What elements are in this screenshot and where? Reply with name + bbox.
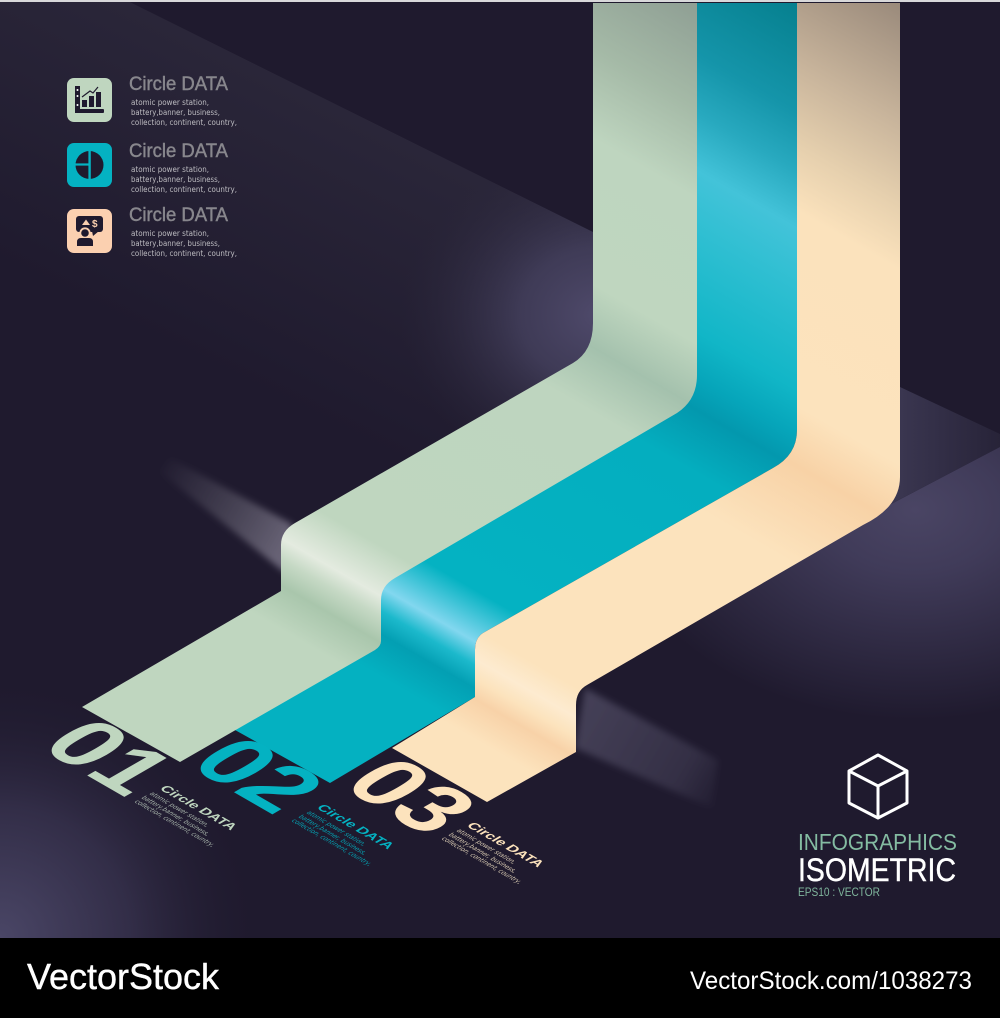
description (131, 165, 237, 194)
title block (798, 829, 957, 899)
footer bar (0, 938, 1000, 1018)
ribbon 02 teal (235, 3, 797, 783)
number 02: 02 (170, 724, 347, 826)
isometric caption 02: atomic power station, (304, 809, 369, 847)
description: collection, continent, country, (131, 185, 237, 194)
legend item 3 (67, 204, 237, 258)
icon: person with speech bubble (67, 209, 112, 253)
footer logo: VectorStock (27, 956, 220, 997)
isometric caption 01: collection, continent, country, (132, 798, 218, 848)
isometric caption 02: battery,banner, business, (296, 813, 370, 856)
isometric caption 03 (439, 820, 549, 885)
light streak left (160, 458, 296, 572)
icon: pie chart (67, 143, 112, 187)
isometric caption 03: battery,banner, business, (446, 831, 520, 874)
isometric caption 02: Circle DATA (313, 802, 399, 851)
description: battery,banner, business, (131, 108, 220, 117)
description: battery,banner, business, (131, 239, 220, 248)
top edge line (0, 0, 1000, 2)
description (131, 98, 237, 127)
isometric caption 01 (132, 783, 242, 848)
isometric caption 01: battery,banner, business, (139, 794, 213, 837)
isometric caption 03: atomic power station, (454, 827, 519, 865)
background: right side face (870, 387, 1000, 515)
background: bottom-left glow (0, 670, 270, 938)
legend item 1 (67, 73, 237, 127)
number 01: 01 (21, 706, 198, 808)
description: collection, continent, country, (131, 118, 237, 127)
number 03: 03 (323, 745, 500, 847)
isometric caption 02: collection, continent, country, (289, 817, 375, 867)
isometric caption 03: collection, continent, country, (439, 835, 525, 885)
heading: Circle DATA (129, 140, 228, 162)
isometric caption 03: Circle DATA (463, 820, 549, 869)
description: atomic power station, (131, 229, 209, 238)
heading: Circle DATA (129, 204, 228, 226)
title block: EPS10 : VECTOR (798, 887, 880, 899)
legend item 2 (67, 140, 237, 194)
isometric caption 02 (289, 802, 399, 867)
heading: Circle DATA (129, 73, 228, 95)
footer image id: VectorStock.com/1038273 (690, 967, 972, 995)
light streak right (575, 688, 718, 808)
icon: isometric cube (849, 755, 907, 818)
ribbon 03 peach (392, 3, 900, 802)
isometric caption 01: Circle DATA (156, 783, 242, 832)
icon: bar chart (67, 78, 112, 122)
description: collection, continent, country, (131, 249, 237, 258)
description (131, 229, 237, 258)
title block: INFOGRAPHICS (798, 829, 957, 855)
description: atomic power station, (131, 98, 209, 107)
isometric caption 01: atomic power station, (147, 790, 212, 828)
title block: ISOMETRIC (798, 852, 956, 888)
background: isometric wall plane (0, 2, 593, 414)
ribbon 01 green (82, 3, 697, 762)
description: atomic power station, (131, 165, 209, 174)
description: battery,banner, business, (131, 175, 220, 184)
icon: person with speech bubble: $ (92, 219, 98, 230)
background: right floor plane (575, 447, 1000, 938)
